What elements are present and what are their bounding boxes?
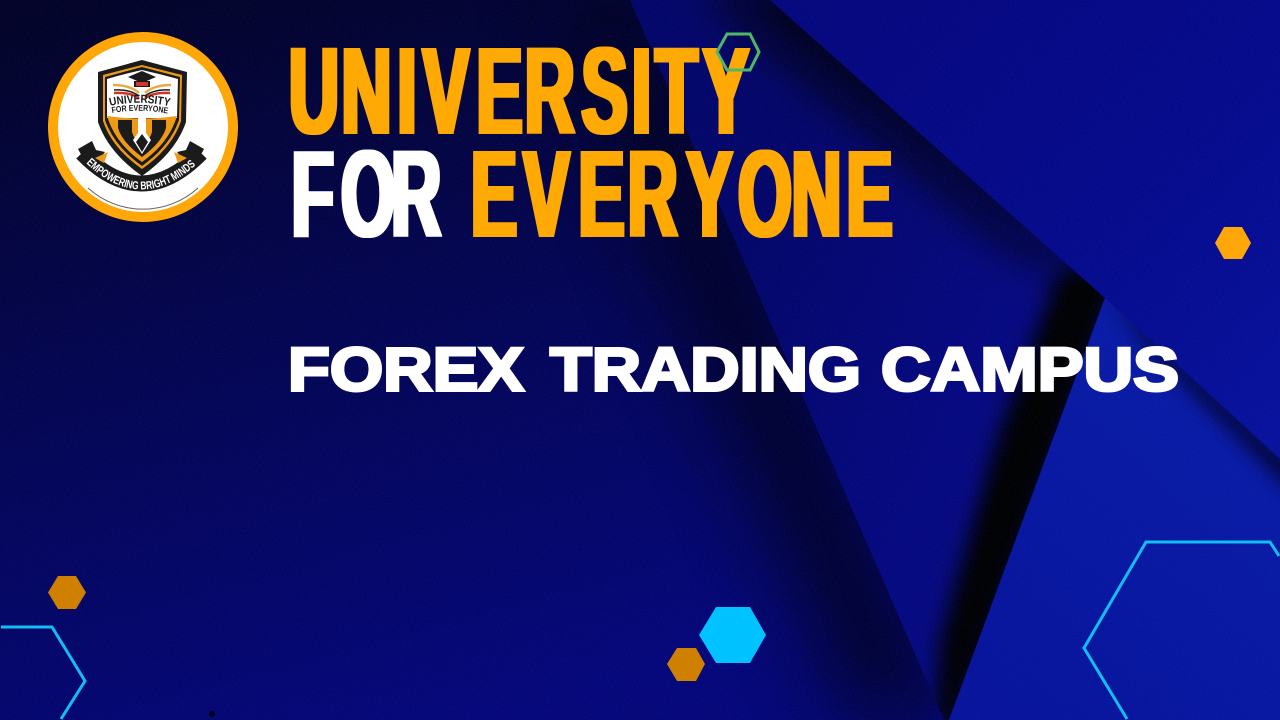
- crest text: FOR EVERYONE: [112, 104, 168, 114]
- crest text: UNIVERSITY: [109, 94, 171, 106]
- crest shield: [98, 60, 187, 176]
- title line 1: UNIVERSITY: [289, 22, 749, 161]
- icon: cyan outline hexagon, bottom right: [1084, 542, 1279, 719]
- panel: lower right sheet: [949, 290, 1280, 720]
- crest ribbon: [76, 141, 207, 192]
- logo: university crest: [48, 32, 238, 222]
- title line 2: FOR EVERYONE: [292, 125, 893, 264]
- subtitle: Forex Trading Campus: FOREX: [288, 336, 524, 404]
- subtitle: Forex Trading Campus: CAMPUS: [881, 336, 1179, 404]
- icon: green outline hexagon: [717, 34, 759, 70]
- crest ribbon: EMPOWERING BRIGHT MINDS: [86, 158, 195, 190]
- icon: cyan outline hexagon, bottom left: [1, 627, 85, 719]
- icon: orange hexagon: [1215, 227, 1251, 259]
- graduation cap and book: [128, 71, 156, 83]
- subtitle: Forex Trading Campus: [288, 336, 1179, 404]
- panel: dark left sheet: [0, 0, 960, 720]
- icon: brown hexagon, bottom centre: [667, 648, 705, 681]
- icon: brown hexagon, bottom left: [48, 576, 86, 609]
- pen nib: [133, 117, 151, 154]
- small dark speck: [209, 711, 215, 717]
- subtitle: Forex Trading Campus: TRADING: [550, 336, 861, 404]
- icon: cyan filled hexagon: [699, 607, 766, 663]
- shield lower orange field: [107, 116, 177, 162]
- panel: top right sheet: [770, 0, 1280, 459]
- panel: middle sheet: [630, 0, 1115, 720]
- title: University for Everyone: [289, 22, 893, 264]
